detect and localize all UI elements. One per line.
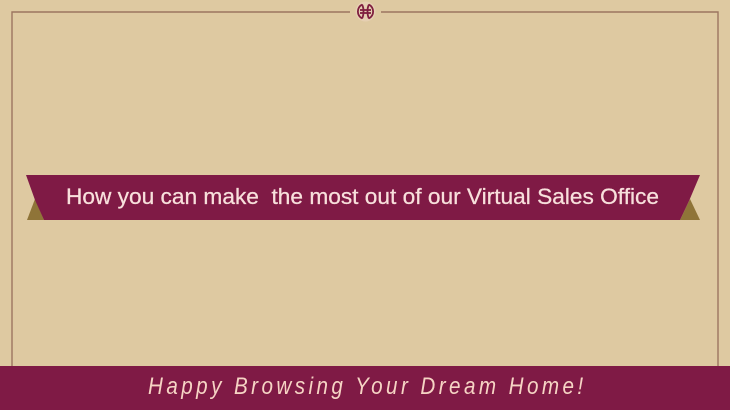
ribbon banner (26, 175, 700, 220)
footer band (0, 366, 730, 410)
ribbon fold: right (680, 199, 700, 220)
footer tagline: Happy Browsing Your Dream Home! (148, 373, 583, 399)
icon: monogram logo (356, 2, 376, 22)
ribbon body (26, 175, 700, 220)
ribbon fold: left (27, 199, 44, 220)
ribbon heading: How you can make the most out of our Virtual Sales Office (66, 184, 659, 209)
